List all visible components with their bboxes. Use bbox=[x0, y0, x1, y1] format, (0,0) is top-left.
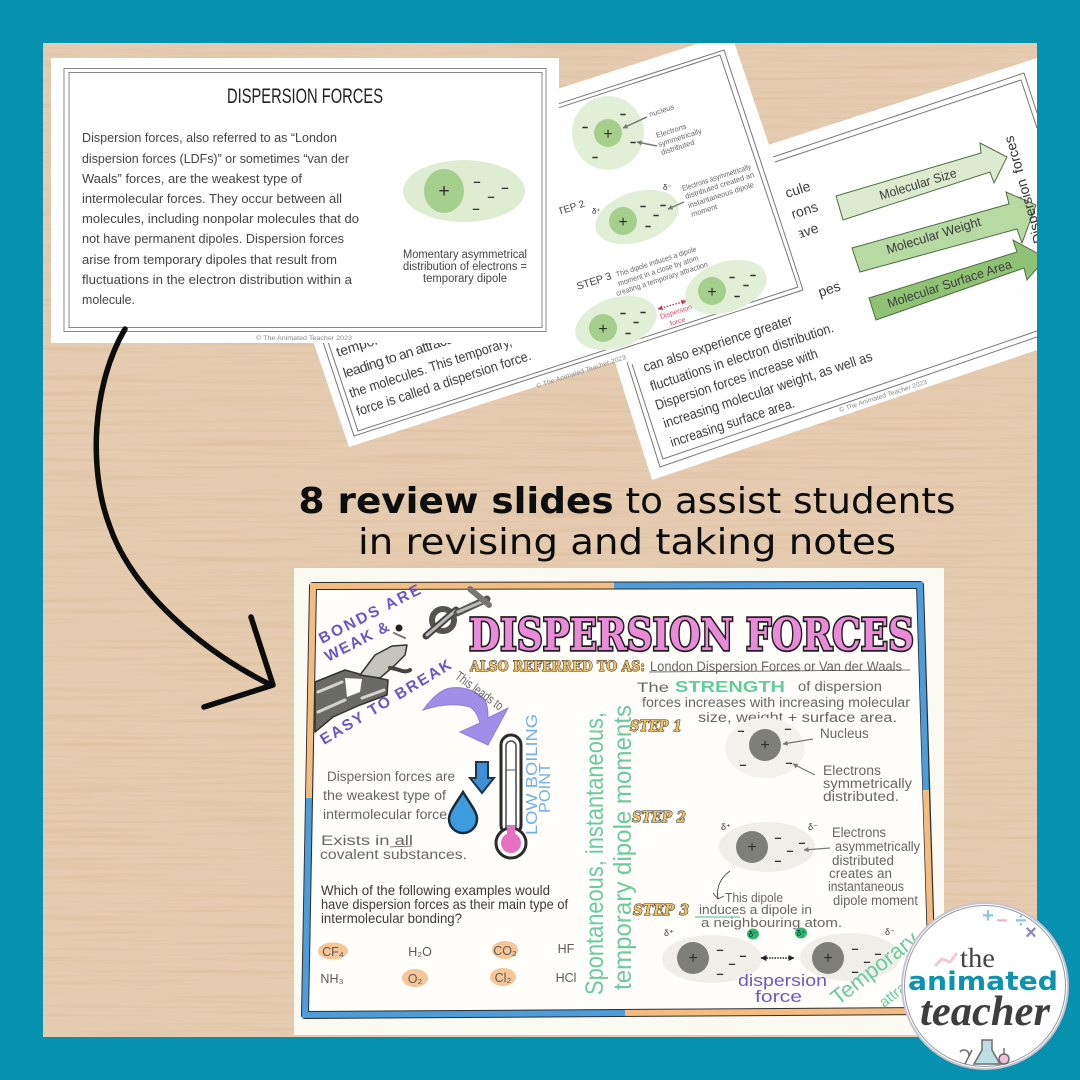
step 2 atom: Electrons bbox=[832, 825, 886, 840]
step 1 molecule: – bbox=[592, 152, 598, 163]
diagram caption: Momentary asymmetrical bbox=[403, 249, 527, 261]
slide 1: dispersion forces definition bbox=[51, 58, 559, 343]
strength note bbox=[637, 679, 911, 725]
arrow: molecular size bbox=[836, 143, 1007, 220]
arrow: molecular weight bbox=[852, 192, 1036, 272]
slide 1 watermark: © The Animated Teacher 2023 bbox=[256, 334, 352, 342]
step 2 molecule: – bbox=[640, 201, 646, 212]
step 3 molecules with dispersion force: – bbox=[734, 291, 740, 302]
question text: intermolecular bonding? bbox=[321, 910, 462, 926]
logo maths symbols: + bbox=[982, 905, 994, 927]
step 2 atom: – bbox=[787, 844, 794, 858]
logo maths symbols: − bbox=[996, 910, 1008, 932]
step 3 note: This dipole induces a dipole bbox=[615, 244, 698, 279]
step 2 molecule: distributed created an bbox=[684, 170, 755, 201]
logo molecule motif bbox=[935, 953, 957, 966]
slide 3 body text: can also experience greater bbox=[641, 311, 795, 375]
logo lab icons bbox=[960, 1040, 1009, 1064]
question text bbox=[321, 882, 568, 926]
step 2 molecule: δ⁻ bbox=[663, 183, 672, 192]
step 3 molecules with dispersion force: + bbox=[707, 284, 717, 301]
step 3 molecules with dispersion force: – bbox=[633, 317, 639, 328]
diagram caption: temporary dipole bbox=[423, 273, 507, 285]
logo wordmark bbox=[908, 943, 1058, 1035]
arrow: molecular size: Molecular Size bbox=[877, 165, 958, 203]
step 3 molecules with dispersion force: – bbox=[625, 328, 631, 339]
step 1 molecule: – bbox=[582, 122, 588, 133]
induced dipole note: induces a dipole in bbox=[699, 902, 812, 917]
slide 3 body text: increasing surface area. bbox=[668, 394, 797, 450]
logo maths symbols bbox=[982, 905, 1037, 944]
slide 1 body text: dispersion forces (LDFs)” or sometimes “van der bbox=[82, 152, 349, 166]
step 1 atom: – bbox=[785, 722, 792, 736]
step 3 atoms bbox=[662, 927, 900, 983]
step 2 molecule: instantaneous dipole bbox=[687, 180, 755, 210]
step 1 molecule: symmetrically bbox=[657, 126, 703, 149]
induced dipole note bbox=[695, 890, 842, 930]
step 2 label: TEP 2 bbox=[557, 199, 587, 218]
label: low boiling point: LOW BOILING bbox=[524, 714, 541, 835]
slide 1 body text: intermolecular forces. They occur between all bbox=[82, 192, 342, 206]
step 2 atom: δ⁻ bbox=[808, 822, 818, 832]
slide 2 body text: temporary attraction, bbox=[334, 305, 461, 360]
step 2 molecule: Electrons asymmetrically bbox=[681, 162, 752, 193]
step 1 molecule: Electrons bbox=[655, 122, 688, 140]
step 2 atom: + bbox=[747, 839, 757, 856]
answer options bbox=[318, 941, 576, 987]
step 1 atom: Nucleus bbox=[820, 726, 869, 741]
temporary dipole diagram: – bbox=[501, 180, 509, 195]
answer options: NH₃ bbox=[320, 972, 344, 986]
step 2 atom: distributed bbox=[832, 853, 894, 868]
strength note: STRENGTH bbox=[675, 679, 785, 696]
label: low boiling point: POINT bbox=[537, 763, 554, 813]
step 2 molecule: – bbox=[660, 200, 666, 211]
arrow: molecular weight: Molecular Weight bbox=[884, 214, 983, 257]
slide 1 body text: not have permanent dipoles. Dispersion forces bbox=[82, 232, 344, 246]
step 2 atom: creates an bbox=[829, 866, 892, 881]
step 3 note: creating a temporary attraction bbox=[615, 260, 709, 298]
label: dispersion force: dispersion bbox=[738, 971, 827, 990]
step 2 atom: dipole moment bbox=[833, 893, 918, 908]
slide 3 body text: increasing molecular weight, as well as bbox=[661, 348, 874, 431]
step 3 molecules with dispersion force: – bbox=[750, 270, 756, 281]
step 2 molecule: δ⁺ bbox=[592, 207, 601, 216]
green label: temporary attraction: attraction bbox=[876, 960, 935, 1011]
handwritten: weakest force note: covalent substances. bbox=[320, 847, 467, 862]
temporary dipole diagram: – bbox=[473, 174, 481, 189]
green vertical handwriting: temporary dipole moments bbox=[609, 705, 637, 990]
step 3 molecules with dispersion force: Dispersion bbox=[659, 304, 693, 321]
purple swoosh arrow bbox=[423, 688, 508, 745]
step 3 atoms: – bbox=[717, 943, 724, 957]
step 3 label: STEP 3 bbox=[633, 902, 689, 919]
step 3 atoms: δ⁻ bbox=[749, 930, 757, 939]
answer options: H₂O bbox=[408, 945, 432, 959]
icon: thermometer bbox=[496, 735, 526, 858]
logo maths symbols: × bbox=[1025, 922, 1037, 944]
slide 2 body text: the molecules. This temporary, bbox=[347, 333, 514, 401]
coloured worksheet border bbox=[305, 585, 933, 1015]
slide 2 watermark: © The Animated Teacher 2023 bbox=[535, 353, 627, 390]
subtitle: also referred to as: ALSO REFERRED TO AS: bbox=[469, 659, 645, 675]
broken chain illustration bbox=[315, 589, 489, 732]
temporary dipole diagram: – bbox=[487, 189, 495, 204]
step 3 atoms: – bbox=[729, 957, 736, 971]
step 1 label: STEP 1 bbox=[630, 718, 682, 735]
diagram caption bbox=[403, 249, 527, 285]
step 3 molecules with dispersion force: – bbox=[743, 280, 749, 291]
strength note: of dispersion bbox=[798, 679, 882, 694]
label: dispersion force: force bbox=[755, 987, 802, 1006]
question text: Which of the following examples would bbox=[321, 882, 550, 898]
partial slide text fragments: cule bbox=[783, 178, 813, 201]
step 3 atoms: – bbox=[740, 949, 747, 963]
heading: 8 review slides: in revising and taking notes bbox=[358, 522, 896, 563]
step 1 atom: Electrons bbox=[823, 763, 881, 778]
step 1 molecule: – bbox=[630, 137, 636, 148]
step 1 atom: – bbox=[786, 756, 793, 770]
slide 1 body text: arise from temporary dipoles that result from bbox=[82, 253, 337, 267]
logo wordmark: the bbox=[960, 943, 995, 973]
handwritten: bonds are weak and easy to break bbox=[316, 582, 455, 748]
step 3 atoms: δ⁺ bbox=[664, 928, 674, 938]
step 1 molecule: nucleus bbox=[648, 102, 675, 119]
slide 1 title: DISPERSION FORCES bbox=[227, 85, 383, 108]
worksheet photo bbox=[294, 568, 944, 1035]
arrow: molecular surface area bbox=[869, 240, 1046, 320]
step 3 molecules with dispersion force: + bbox=[598, 321, 608, 338]
green label: temporary attraction: Temporary bbox=[826, 926, 923, 1010]
step 3 atoms: – bbox=[852, 942, 859, 956]
step 2 molecule bbox=[592, 164, 754, 244]
curved note arrow bbox=[713, 871, 730, 899]
step 1 molecule: – bbox=[620, 109, 626, 120]
step 1 molecule: distributed bbox=[660, 138, 696, 157]
slide 2: dipole steps bbox=[314, 43, 804, 447]
label: low boiling point bbox=[524, 714, 554, 835]
step 1 molecule bbox=[572, 96, 703, 170]
axis label: dispersion forces: Dispersion forces bbox=[1001, 134, 1047, 245]
step 1 atom: – bbox=[738, 724, 745, 738]
slide 1 body text: Waals” forces, are the weakest type of bbox=[82, 172, 303, 186]
slide 1 body text: molecule. bbox=[82, 293, 135, 307]
step 3 atoms: δ⁺ bbox=[797, 929, 805, 938]
answer options: Cl₂ bbox=[495, 971, 511, 985]
handwritten: bonds are weak and easy to break: EASY TO BREAK bbox=[317, 656, 455, 748]
step 1 atom bbox=[725, 718, 912, 804]
step 1 molecule: + bbox=[603, 126, 613, 143]
step 3 atoms: – bbox=[852, 965, 859, 979]
slide 1 body text bbox=[82, 131, 359, 307]
step 3 atoms: – bbox=[864, 955, 871, 969]
step 3 molecules with dispersion force: – bbox=[729, 272, 735, 283]
partial slide text fragments bbox=[786, 183, 840, 300]
step 2 label: STEP 2 bbox=[632, 809, 686, 826]
step 1 atom: – bbox=[740, 758, 747, 772]
induced dipole note: This dipole bbox=[725, 890, 783, 905]
step 2 atom: instantaneous bbox=[828, 879, 904, 894]
step 2 atom: – bbox=[799, 836, 806, 850]
slide 1 body text: fluctuations in the electron distribution within a bbox=[82, 273, 352, 287]
handwritten: weakest force note bbox=[320, 769, 467, 862]
step 2 atom: – bbox=[775, 854, 782, 868]
step 2 atom: δ⁺ bbox=[721, 822, 731, 832]
icon: water drop bbox=[449, 792, 477, 833]
answer options: CF₄ bbox=[322, 945, 344, 959]
step 1 atom: + bbox=[760, 737, 770, 754]
arrow: molecular surface area: Molecular Surface Area bbox=[885, 256, 1014, 311]
answer options: CO₂ bbox=[493, 944, 517, 958]
step 2 molecule: – bbox=[653, 210, 659, 221]
step 3 molecules with dispersion force: – bbox=[640, 307, 646, 318]
slide 3 watermark: © The Animated Teacher 2023 bbox=[838, 378, 928, 414]
logo maths symbols: ÷ bbox=[1016, 910, 1027, 932]
step 1 atom: symmetrically bbox=[823, 776, 912, 791]
handwritten: weakest force note: Exists in all bbox=[321, 833, 413, 848]
answer options: HCl bbox=[556, 971, 576, 985]
strength note: The bbox=[637, 680, 669, 695]
step 3 atoms: + bbox=[688, 950, 698, 967]
step 3 note: moment in a close by atom bbox=[617, 253, 700, 288]
handwritten: bonds are weak and easy to break: WEAK & bbox=[322, 619, 392, 666]
curved arrow from slide to worksheet bbox=[96, 329, 273, 707]
partial slide text fragments: pes bbox=[816, 278, 842, 300]
logo: the animated teacher bbox=[902, 903, 1068, 1069]
temporary dipole diagram bbox=[403, 160, 525, 222]
question text: have dispersion forces as their main type of bbox=[321, 896, 568, 912]
handwritten: weakest force note: intermolecular force. bbox=[323, 807, 451, 822]
heading: 8 review slides: 8 review slides to assist students bbox=[298, 481, 956, 522]
step 2 atom: asymmetrically bbox=[835, 839, 920, 854]
diagram caption: distribution of electrons = bbox=[403, 261, 527, 273]
answer options: O₂ bbox=[408, 972, 422, 986]
logo wordmark: animated bbox=[908, 967, 1058, 997]
induced dipole note: a neighbouring atom. bbox=[701, 915, 842, 930]
logo wordmark: teacher bbox=[920, 989, 1051, 1035]
step 2 molecule: + bbox=[618, 214, 628, 231]
step 2 molecule: moment bbox=[690, 202, 719, 219]
strength note: size, weight + surface area. bbox=[698, 710, 897, 725]
step 3 atoms: + bbox=[823, 950, 833, 967]
step 2 molecule: – bbox=[645, 221, 651, 232]
label: dispersion force bbox=[738, 971, 827, 1006]
step 3 molecules with dispersion force bbox=[575, 260, 767, 350]
slide 3: molecular size, weight and surface area bbox=[614, 58, 1037, 480]
answer options: HF bbox=[558, 942, 575, 956]
step 3 atoms: – bbox=[875, 947, 882, 961]
strength note: forces increases with increasing molecular bbox=[642, 695, 911, 710]
slide 3 body text bbox=[641, 311, 874, 450]
step 3 atoms: – bbox=[717, 967, 724, 981]
partial slide text fragments: ave bbox=[794, 220, 821, 242]
partial slide text fragments: rons bbox=[789, 198, 820, 222]
temporary dipole diagram: – bbox=[472, 201, 480, 216]
step 3 molecules with dispersion force: force bbox=[669, 316, 687, 328]
step 2 atom bbox=[719, 822, 920, 908]
green vertical handwriting bbox=[581, 705, 637, 995]
step 2 atom: – bbox=[775, 831, 782, 845]
handwritten: weakest force note: Dispersion forces are bbox=[327, 769, 455, 784]
handwritten: bonds are weak and easy to break: BONDS ARE bbox=[316, 582, 424, 648]
slide 1 body text: molecules, including nonpolar molecules that do bbox=[82, 212, 359, 226]
note: this leads to: This leads to bbox=[452, 668, 506, 713]
step 3 label: STEP 3 bbox=[575, 270, 613, 293]
title: dispersion forces: DISPERSION FORCES bbox=[469, 610, 914, 661]
temporary dipole diagram: + bbox=[438, 181, 450, 202]
slide 2 body text: leading to an attraction between bbox=[341, 310, 517, 381]
icon: blue down arrow bbox=[470, 762, 494, 793]
step 3 molecules with dispersion force: – bbox=[620, 308, 626, 319]
handwritten: weakest force note: the weakest type of bbox=[323, 788, 446, 803]
step 3 atoms: δ⁻ bbox=[885, 927, 895, 937]
slide 1 body text: Dispersion forces, also referred to as “London bbox=[82, 131, 337, 145]
green vertical handwriting: Spontaneous, instantaneous, bbox=[581, 712, 609, 995]
slide 2 body text: force is called a dispersion force. bbox=[354, 347, 533, 419]
slide 3 body text: Dispersion forces increase with bbox=[653, 345, 820, 413]
slide 3 body text: fluctuations in electron distribution. bbox=[648, 319, 836, 394]
heading: 8 review slides bbox=[298, 481, 956, 563]
step 1 atom: distributed. bbox=[823, 789, 899, 804]
handwritten alternative names: London Dispersion Forces or Van der Waals bbox=[650, 659, 902, 674]
